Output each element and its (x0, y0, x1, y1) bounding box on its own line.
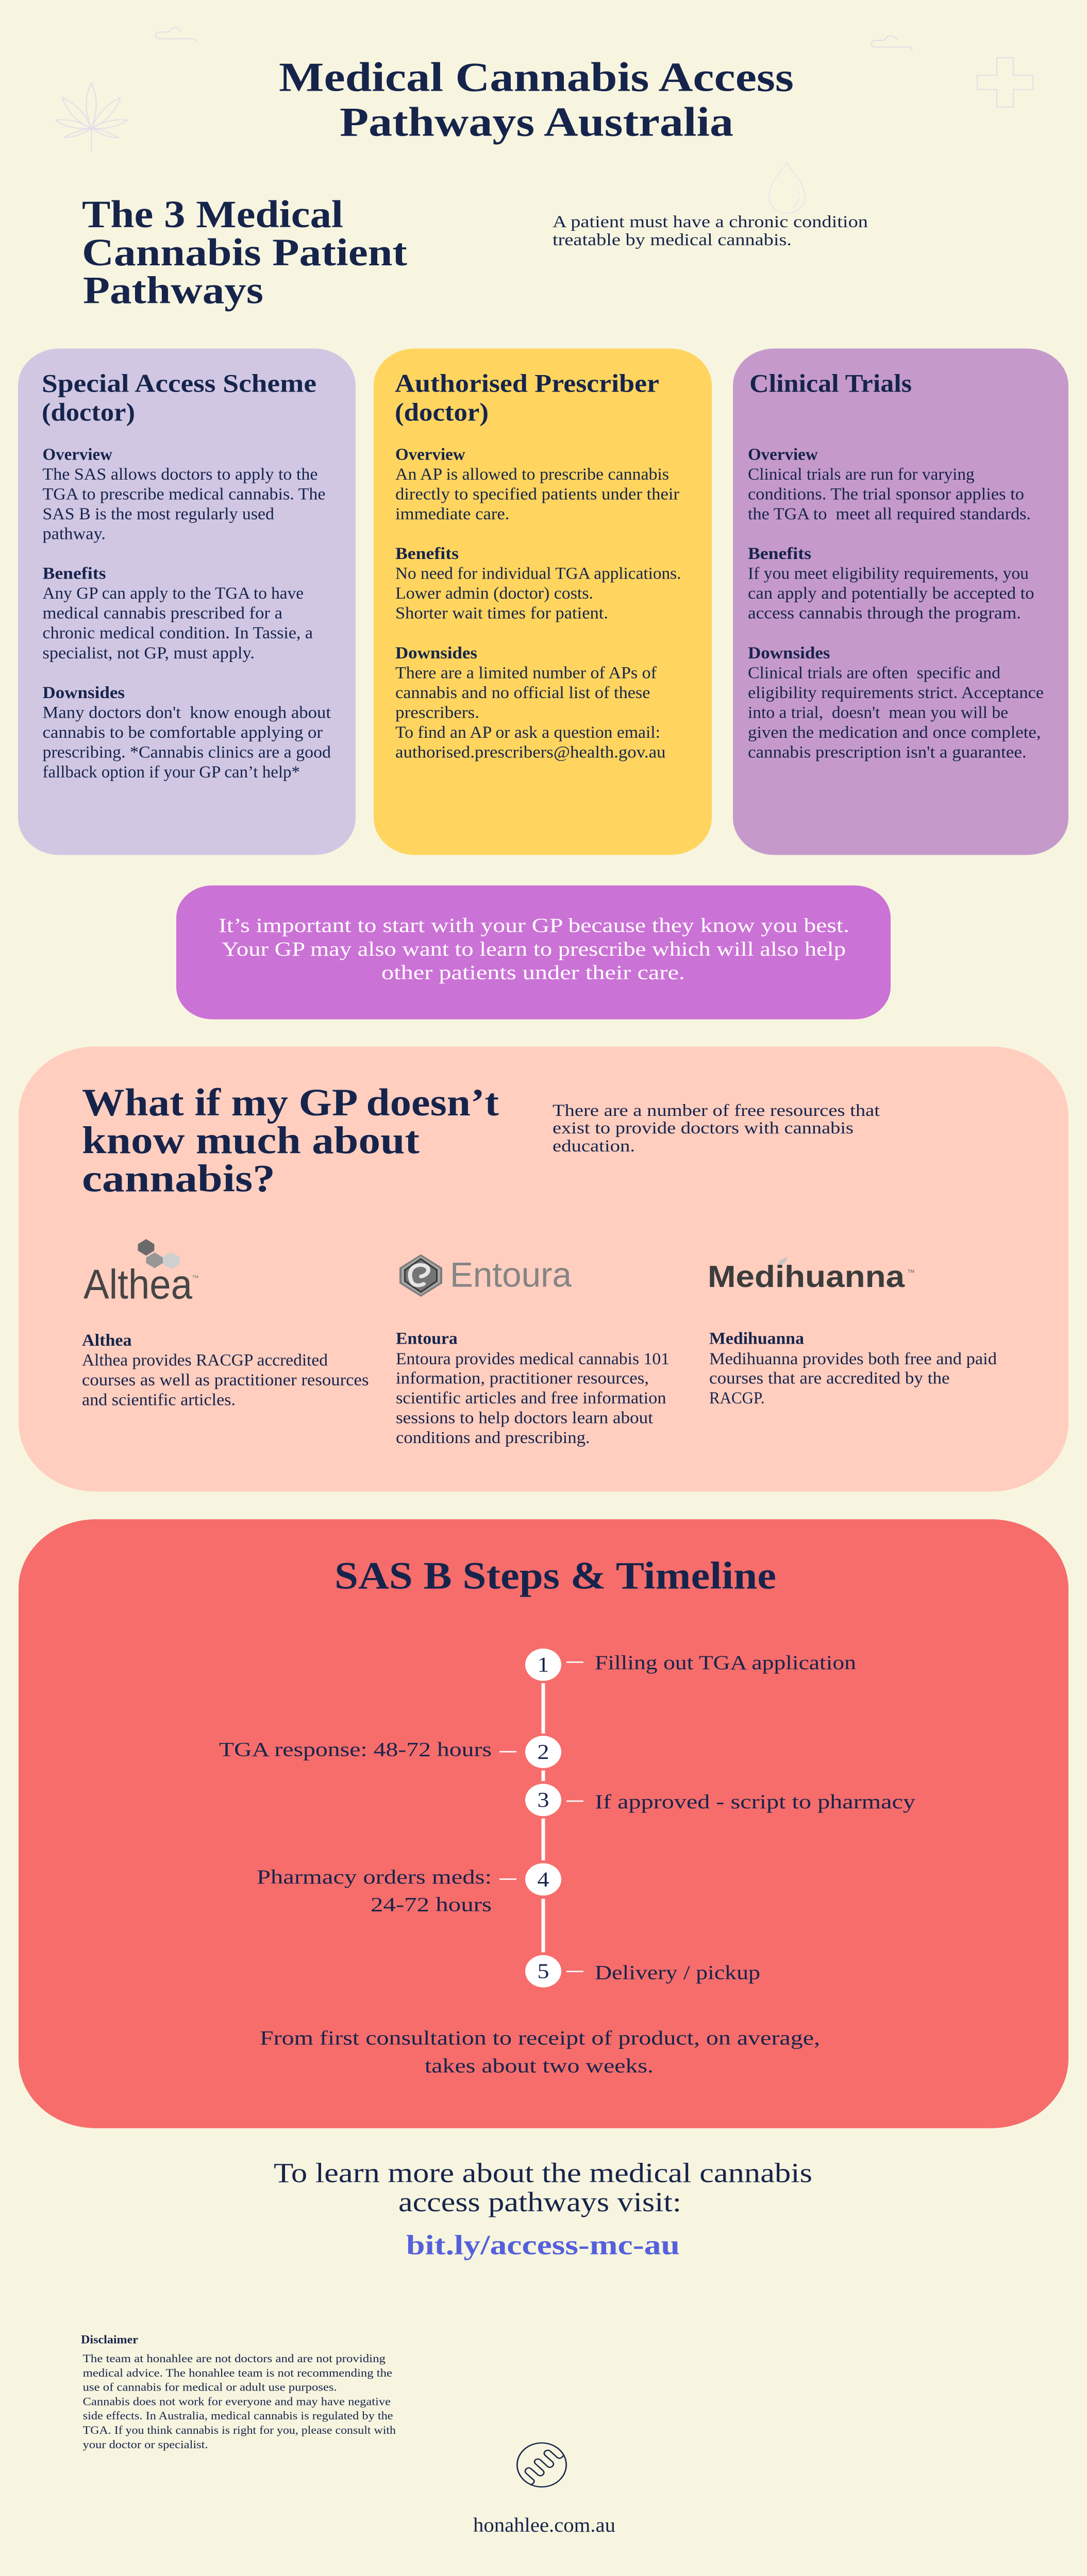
icon: cloud left (156, 27, 196, 42)
card heading: (doctor) (42, 398, 135, 427)
logo: Medihuanna: Medihuanna (708, 1260, 905, 1294)
resource text: Medihuanna: RACGP. (709, 1389, 765, 1408)
resource text: Althea: Althea (82, 1332, 132, 1350)
overview: Overview (395, 446, 465, 464)
step 2 (219, 1736, 561, 1768)
resource text: Entoura: conditions and prescribing. (396, 1429, 590, 1447)
call to action text (274, 2158, 812, 2217)
benefits: medical cannabis prescribed for a (42, 603, 282, 622)
benefits: Benefits (42, 565, 106, 583)
benefits (748, 545, 1034, 622)
downsides: Downsides (395, 644, 477, 662)
step 2: TGA response: 48-72 hours (219, 1739, 492, 1761)
step 3 (525, 1784, 915, 1816)
overview: directly to specified patients under their (395, 484, 679, 503)
intro text (553, 1101, 880, 1155)
title: Pathways Australia (340, 99, 733, 145)
call to action text: access pathways visit: (398, 2187, 681, 2217)
downsides: Downsides (42, 684, 125, 702)
heading: cannabis? (82, 1158, 275, 1200)
overview: SAS B is the most regularly used (42, 504, 274, 523)
benefits (395, 545, 681, 622)
card heading: Clinical Trials (749, 369, 912, 398)
resource text: Medihuanna: courses that are accredited by the (709, 1369, 950, 1387)
callout: start with your GP: Your GP may also want to learn to prescribe which will also help (222, 938, 846, 960)
logo: honahlee (517, 2443, 566, 2487)
logo: Althea (83, 1239, 198, 1308)
overview: Overview (748, 446, 818, 464)
callout: start with your GP: It’s important to start with your GP because they know you best. (219, 914, 849, 937)
downsides: There are a limited number of APs of (395, 663, 657, 682)
card heading: Authorised Prescriber (395, 369, 659, 398)
disclaimer: Disclaimer (81, 2333, 138, 2346)
logo: Althea: Althea (83, 1262, 192, 1308)
timeline line (541, 1683, 545, 1952)
step 4: 4 (538, 1868, 549, 1891)
benefits (42, 565, 313, 662)
heading: three pathways: Cannabis Patient (82, 231, 407, 274)
card heading (42, 369, 316, 427)
overview (395, 446, 679, 523)
step 3: 3 (538, 1788, 549, 1812)
disclaimer: The team at honahlee are not doctors and are not providing (83, 2352, 386, 2365)
step 5: Delivery / pickup (595, 1961, 760, 1984)
benefits: Benefits (748, 545, 811, 563)
downsides (395, 644, 666, 761)
step 2: 2 (538, 1740, 549, 1764)
logo: Entoura (399, 1255, 572, 1297)
benefits: Any GP can apply to the TGA to have (42, 584, 304, 603)
disclaimer (81, 2333, 396, 2451)
heading: SAS B Steps & Timeline (335, 1554, 776, 1597)
overview: immediate care. (395, 504, 509, 523)
overview: Overview (42, 446, 112, 464)
downsides: fallback option if your GP can’t help* (42, 762, 300, 782)
intro text (553, 213, 868, 249)
downsides: To find an AP or ask a question email: (395, 723, 660, 741)
resource text: Entoura: sessions to help doctors learn about (396, 1409, 654, 1427)
step 4: Pharmacy orders meds: (257, 1866, 492, 1888)
heading: three pathways (82, 193, 407, 312)
resource text: Medihuanna: Medihuanna provides both free and paid (709, 1350, 997, 1368)
intro text: treatable by medical cannabis. (553, 231, 792, 249)
downsides: Many doctors don't know enough about (42, 703, 331, 722)
call to action text: To learn more about the medical cannabis (274, 2158, 812, 2189)
downsides: Downsides (748, 644, 830, 662)
downsides: authorised.prescribers@health.gov.au (395, 742, 665, 761)
icon: cloud right (872, 36, 912, 50)
step 1 (525, 1649, 856, 1681)
icon: cannabis leaf (56, 83, 127, 152)
benefits: access cannabis through the program. (748, 603, 1021, 622)
downsides (42, 684, 331, 782)
resource text: Entoura: information, practitioner resources, (396, 1369, 649, 1387)
benefits: Lower admin (doctor) costs. (395, 584, 593, 603)
timeline summary: From first consultation to receipt of product, on average, (260, 2027, 820, 2049)
resource text: Althea: Althea provides RACGP accredited (82, 1351, 328, 1369)
benefits: specialist, not GP, must apply. (42, 643, 255, 662)
overview: pathway. (42, 524, 106, 543)
step 1: Filling out TGA application (595, 1652, 856, 1674)
heading: know much about (82, 1119, 420, 1162)
benefits: Shorter wait times for patient. (395, 603, 608, 622)
heading: three pathways: The 3 Medical (82, 193, 343, 236)
panel: special access scheme (18, 349, 356, 855)
intro text: exist to provide doctors with cannabis (553, 1119, 854, 1137)
overview: Clinical trials are run for varying (748, 465, 975, 484)
resource text: Entoura (396, 1330, 670, 1447)
step 5 (525, 1955, 760, 1988)
card heading (395, 369, 659, 427)
heading: What if my GP doesn’t (82, 1081, 499, 1124)
resource text: Entoura: scientific articles and free information (396, 1389, 666, 1408)
disclaimer: your doctor or specialist. (83, 2438, 208, 2451)
disclaimer: medical advice. The honahlee team is not recommending the (83, 2367, 392, 2380)
downsides: prescribers. (395, 703, 479, 722)
timeline summary (260, 2027, 820, 2077)
overview: the TGA to meet all required standards. (748, 504, 1031, 523)
resource text: Medihuanna: Medihuanna (709, 1330, 804, 1348)
downsides: given the medication and once complete, (748, 723, 1041, 741)
resource text: Althea: courses as well as practitioner resources (82, 1371, 369, 1389)
website: honahlee.com.au (473, 2514, 615, 2536)
callout: start with your GP: other patients under their care. (381, 962, 685, 984)
overview (748, 446, 1031, 523)
card heading: Special Access Scheme (42, 369, 316, 398)
step 5: 5 (538, 1960, 549, 1983)
downsides: cannabis prescription isn't a guarantee. (748, 742, 1027, 761)
intro text: education. (553, 1137, 635, 1155)
disclaimer: side effects. In Australia, medical cannabis is regulated by the (83, 2410, 393, 2422)
panel: GP education resources (19, 1046, 1068, 1492)
overview: TGA to prescribe medical cannabis. The (42, 484, 325, 503)
resource text: Entoura: Entoura provides medical cannabis 101 (396, 1350, 670, 1368)
disclaimer: use of cannabis for medical or adult use purposes. (83, 2381, 337, 2394)
title: Medical Cannabis Access (279, 55, 794, 100)
icon: medical cross (977, 58, 1033, 107)
panel: authorised prescriber (374, 349, 712, 855)
downsides: prescribing. *Cannabis clinics are a good (42, 742, 331, 761)
benefits: Benefits (395, 545, 459, 563)
resource text: Entoura: Entoura (396, 1330, 458, 1348)
downsides: eligibility requirements strict. Acceptance (748, 683, 1044, 702)
overview: conditions. The trial sponsor applies to (748, 484, 1024, 503)
resource text: Medihuanna (709, 1330, 997, 1408)
benefits: No need for individual TGA applications. (395, 564, 681, 583)
heading (82, 1081, 499, 1200)
resource text: Althea (82, 1332, 369, 1409)
benefits: can apply and potentially be accepted to (748, 584, 1034, 603)
callout: start with your GP (176, 886, 891, 1019)
downsides: cannabis to be comfortable applying or (42, 723, 323, 741)
disclaimer: Cannabis does not work for everyone and may have negative (83, 2396, 391, 2408)
panel: clinical trials (733, 349, 1068, 855)
downsides: cannabis and no official list of these (395, 683, 650, 702)
step 4: 24-72 hours (371, 1894, 492, 1916)
overview: An AP is allowed to prescribe cannabis (395, 465, 669, 484)
panel: SAS B steps and timeline (19, 1519, 1068, 2128)
benefits: If you meet eligibility requirements, you (748, 564, 1029, 583)
card heading: (doctor) (395, 398, 489, 427)
logo: Entoura: Entoura (450, 1256, 572, 1294)
disclaimer: TGA. If you think cannabis is right for you, please consult with (83, 2424, 396, 2437)
downsides: into a trial, doesn't mean you will be (748, 703, 1008, 722)
step 1: 1 (538, 1653, 549, 1676)
intro text: A patient must have a chronic condition (553, 213, 868, 231)
timeline summary: takes about two weeks. (425, 2055, 654, 2077)
overview: The SAS allows doctors to apply to the (42, 465, 318, 484)
resource text: Althea: and scientific articles. (82, 1391, 236, 1409)
link: bit.ly/access-mc-au (406, 2230, 680, 2261)
benefits: chronic medical condition. In Tassie, a (42, 623, 313, 642)
downsides: Clinical trials are often specific and (748, 663, 1000, 682)
icon: water drop (769, 163, 805, 213)
logo: Medihuanna: TM (908, 1269, 914, 1274)
step 4 (257, 1863, 561, 1916)
intro text: There are a number of free resources that (553, 1101, 880, 1120)
title (279, 55, 794, 145)
overview (42, 446, 325, 543)
step 3: If approved - script to pharmacy (595, 1791, 915, 1813)
heading: three pathways: Pathways (83, 269, 263, 312)
downsides (748, 644, 1044, 761)
logo: Althea: TM (192, 1275, 198, 1279)
